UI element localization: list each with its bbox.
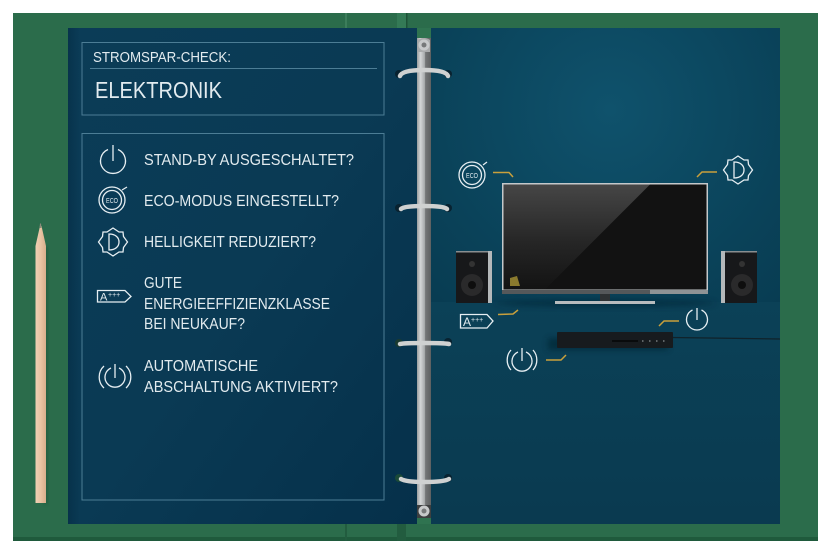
item: energy class: BEI NEUKAUF? — [144, 316, 245, 333]
arrow: energy label — [498, 310, 518, 314]
icon: energy label: A — [100, 292, 108, 304]
item: energy class — [144, 275, 330, 333]
title: ELEKTRONIK — [95, 77, 222, 103]
icon: energy label callout: +++ — [471, 317, 483, 324]
subtitle: STROMSPAR-CHECK: — [93, 50, 231, 66]
item: auto power-off: ABSCHALTUNG AKTIVIERT? — [144, 379, 338, 396]
icon: eco — [99, 187, 127, 213]
icon: energy label callout: A — [463, 315, 471, 329]
arrow: brightness — [697, 172, 717, 177]
icon: eco: ECO — [106, 196, 118, 205]
item: brightness: HELLIGKEIT REDUZIERT? — [144, 234, 316, 251]
icon: power — [100, 145, 125, 173]
icon: brightness — [98, 228, 128, 256]
icon: auto power-off callout — [507, 348, 537, 371]
left speaker — [456, 251, 492, 303]
panel: checklist — [82, 134, 384, 500]
icon: brightness callout — [724, 156, 752, 184]
arrow: eco — [493, 172, 513, 177]
icon: power callout — [686, 308, 707, 330]
icon: eco callout — [459, 162, 487, 188]
arrow: auto power-off — [546, 355, 566, 360]
panel: right page — [431, 28, 780, 524]
icon: energy label — [98, 290, 131, 304]
pencil — [36, 224, 48, 504]
set-top box — [548, 332, 780, 350]
panel: left page — [68, 28, 417, 524]
icon: energy label callout — [460, 314, 493, 329]
energy badge on screen — [510, 276, 520, 286]
binder mechanism — [395, 38, 452, 518]
right speaker — [721, 251, 757, 303]
item: auto power-off: AUTOMATISCHE — [144, 358, 258, 375]
item: stand-by: STAND-BY AUSGESCHALTET? — [144, 152, 354, 169]
icon: eco callout: ECO — [466, 171, 478, 180]
icon: auto power-off — [99, 364, 131, 388]
item: eco: ECO-MODUS EINGESTELLT? — [144, 193, 339, 210]
item: energy class: ENERGIEEFFIZIENZKLASSE — [144, 296, 330, 313]
icon: energy label: +++ — [108, 292, 120, 299]
arrow: power — [659, 321, 679, 326]
item: auto power-off — [144, 358, 338, 396]
television — [495, 183, 715, 307]
item: energy class: GUTE — [144, 275, 182, 292]
panel: title box — [82, 42, 384, 115]
